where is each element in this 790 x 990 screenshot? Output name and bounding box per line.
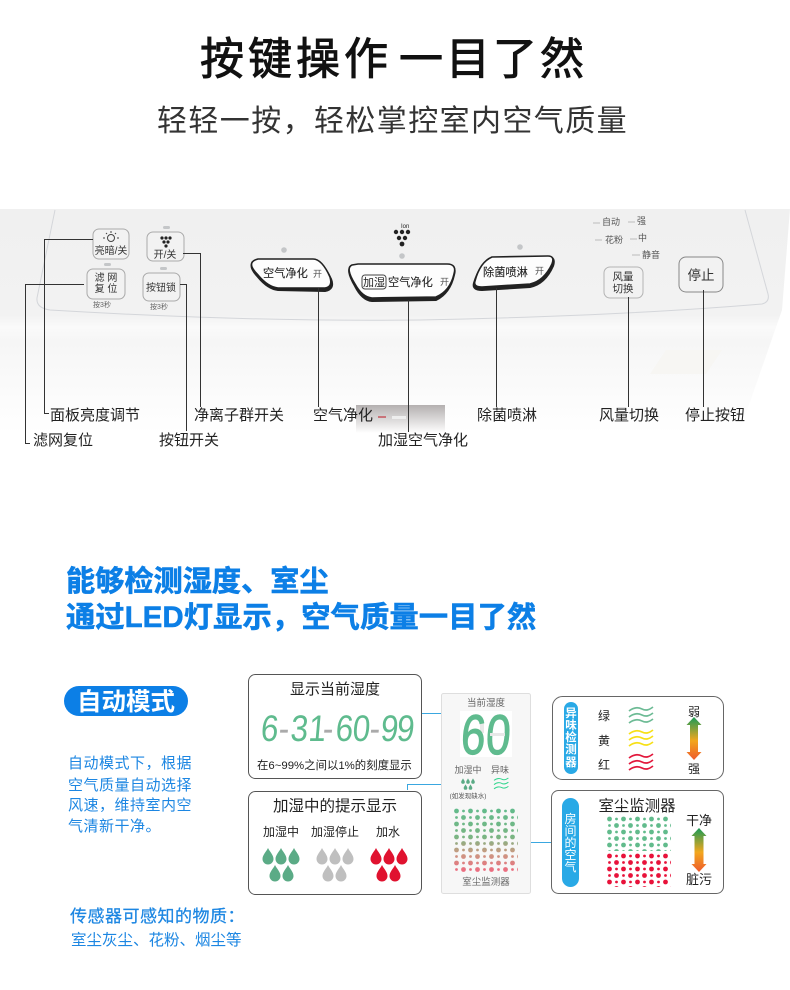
sensor substances: 传感器可感知的物质：	[70, 907, 245, 926]
humidity range digits: 0	[351, 709, 372, 750]
panel: device display: 异味	[491, 764, 509, 775]
sensor substances: 室尘灰尘、花粉、烟尘等	[71, 931, 242, 949]
button: filter reset: 复 位	[95, 282, 117, 295]
indicator leds	[104, 226, 523, 270]
button: filter reset: 按3秒	[93, 300, 111, 309]
button: stop: 停止	[688, 267, 714, 283]
arrow: clean to dirty	[692, 828, 706, 872]
button: fan speed: 风量	[612, 271, 634, 283]
button: humidify purify: 加湿	[363, 276, 385, 289]
callout labels: 加湿空气净化	[378, 432, 468, 449]
mode labels: 静音	[642, 249, 660, 260]
button: lock: 按钮锁	[146, 281, 176, 294]
button: lock	[143, 273, 180, 311]
auto mode description: 风速，维持室内空	[68, 797, 192, 814]
mode labels: 强	[637, 216, 646, 226]
button: ion switch: 开/关	[154, 248, 176, 261]
callout labels	[33, 406, 745, 449]
arrow: weak to strong	[686, 717, 702, 760]
section heading	[66, 565, 536, 634]
room air pill label	[562, 798, 579, 887]
button: lock: 按3秒	[150, 302, 168, 311]
green dots: clean	[606, 816, 671, 851]
button: brightness	[93, 229, 129, 259]
humidity range digits: 3	[289, 709, 310, 750]
mode labels: 自动	[602, 216, 620, 227]
section heading: 能够检测湿度、室尘	[66, 565, 329, 598]
panel: humidity display: 显示当前湿度	[290, 681, 380, 698]
sensor substances	[70, 907, 245, 949]
odor pill label: 测	[565, 742, 577, 756]
button: humidify purify: 空气净化	[388, 275, 433, 289]
room air pill label: 气	[564, 859, 577, 874]
big humidity readout	[459, 703, 513, 766]
panel: odor detector: 弱	[688, 705, 700, 719]
body window	[650, 350, 722, 374]
odor pill label	[564, 702, 578, 774]
odor level labels	[598, 708, 610, 772]
device body background	[0, 209, 790, 445]
title: 按键操作	[200, 35, 392, 84]
humidity range digits: -	[321, 709, 335, 750]
panel: humidity display: 在6~99%之间以1%的刻度显示	[257, 758, 412, 772]
connector lines	[408, 712, 551, 844]
panel: device display	[442, 694, 530, 894]
panel: odor detector: 强	[688, 762, 700, 776]
odor waves	[629, 707, 653, 770]
button: air purify	[252, 259, 332, 291]
button: filter reset	[87, 269, 125, 309]
mode labels: 花粉	[605, 234, 623, 245]
button: sterilize spray	[474, 256, 554, 290]
callout labels: 空气净化	[313, 407, 373, 424]
callout labels: 除菌喷淋	[477, 407, 537, 424]
button: fan speed: 切换	[612, 282, 634, 295]
panel: dust monitor: 室尘监测器	[599, 797, 675, 815]
icon: small drops	[461, 778, 475, 790]
button: air purify: 开	[313, 269, 322, 279]
mode labels	[593, 216, 660, 260]
panel: device control panel	[0, 209, 790, 445]
icon: green drops	[262, 848, 300, 882]
room air pill label: 的	[564, 835, 577, 850]
display reflection	[356, 405, 445, 433]
panel: device display: 当前湿度	[467, 697, 505, 709]
button: ion switch	[147, 232, 184, 261]
auto mode description: 空气质量自动选择	[68, 777, 192, 794]
odor pill label: 味	[565, 718, 577, 732]
odor level labels: 绿	[598, 708, 610, 723]
big humidity readout: 6	[459, 703, 488, 766]
panel: device display: 加湿中	[454, 764, 482, 775]
odor level labels: 黄	[598, 734, 610, 748]
panel outline	[37, 210, 768, 320]
panel: dust monitor	[552, 790, 724, 894]
state labels: 加湿停止	[311, 824, 359, 839]
panel: humidifying indicators	[248, 792, 422, 894]
panel: device display: (如发现缺水)	[450, 791, 486, 800]
panel: odor detector	[552, 696, 724, 780]
room air pill label: 房	[564, 811, 577, 826]
button: sterilize spray: 除菌喷淋	[483, 265, 528, 279]
button: humidify purify: 开	[440, 277, 449, 287]
panel: dust monitor: 脏污	[686, 872, 712, 887]
odor pill label: 检	[565, 730, 577, 744]
subtitle: 轻轻一按，轻松掌控室内空气质量	[157, 105, 628, 138]
callout labels: 净离子群开关	[194, 407, 284, 424]
red dots: dirty	[606, 853, 671, 887]
icon: small odor waves	[494, 778, 508, 789]
odor pill label: 异	[565, 707, 577, 720]
humidity range digits: 9	[379, 709, 400, 750]
auto mode description: 气清新干净。	[68, 818, 161, 835]
dust monitor dots	[453, 808, 518, 872]
big humidity readout: 0	[484, 703, 513, 766]
button: stop	[679, 257, 723, 292]
icon: red drops	[370, 848, 408, 882]
auto mode description	[68, 755, 192, 835]
title	[200, 35, 587, 84]
callout labels: 风量切换	[599, 407, 659, 424]
icon: ion logo: Ion	[401, 224, 409, 230]
button: sterilize spray: 开	[535, 266, 544, 276]
icon: ion logo	[394, 224, 410, 246]
panel: humidity display	[248, 674, 422, 778]
panel: humidifying indicators: 加湿中的提示显示	[273, 797, 397, 815]
odor level labels: 红	[598, 757, 610, 772]
title: 一目了然	[399, 35, 587, 84]
mode labels: 中	[638, 232, 647, 243]
callout labels: 滤网复位	[33, 431, 93, 449]
icon: grey drops	[316, 848, 354, 882]
room air pill label: 间	[564, 824, 577, 838]
room air pill label: 空	[564, 848, 577, 862]
panel: device display: 室尘监测器	[462, 876, 510, 888]
humidity range digits: -	[368, 709, 382, 750]
callout labels: 按钮开关	[159, 432, 219, 449]
state labels: 加水	[376, 825, 400, 839]
panel: dust monitor: 干净	[686, 813, 712, 828]
badge: auto mode: 自动模式	[77, 688, 175, 716]
button: fan speed	[604, 267, 643, 298]
state labels	[263, 824, 400, 839]
humidity range digits: 6	[334, 709, 355, 750]
humidity range digits: 9	[395, 709, 416, 750]
humidity range digits: -	[277, 709, 291, 750]
humidity range digits: 6	[259, 709, 280, 750]
button: filter reset: 滤 网	[95, 271, 117, 284]
state labels: 加湿中	[263, 824, 299, 839]
callout labels: 停止按钮	[685, 407, 745, 424]
button: humidify purify	[349, 264, 455, 301]
callout labels: 面板亮度调节	[50, 406, 140, 424]
section heading: 通过LED灯显示，空气质量一目了然	[66, 601, 536, 634]
button: air purify: 空气净化	[263, 266, 308, 280]
auto mode description: 自动模式下，根据	[68, 755, 192, 772]
odor pill label: 器	[565, 756, 577, 769]
button: brightness: 亮暗/关	[95, 244, 127, 257]
callout lines	[26, 240, 704, 444]
humidity range digits: 1	[307, 709, 328, 750]
